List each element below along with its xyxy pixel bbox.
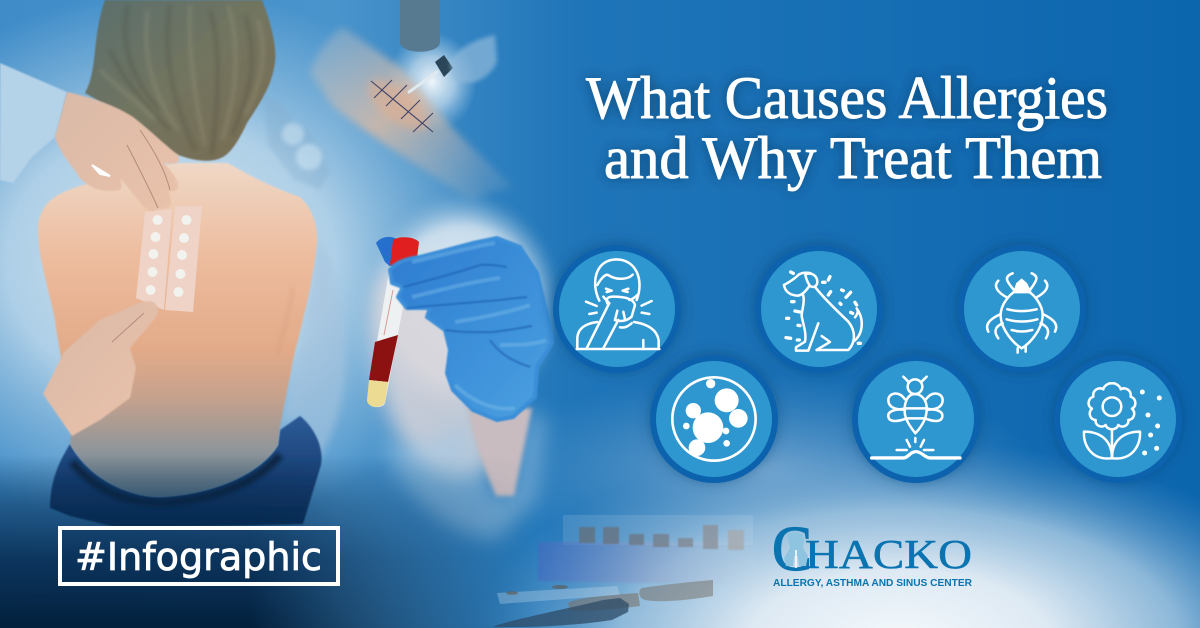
collection tube xyxy=(493,598,629,627)
logo lungs figure xyxy=(784,532,808,568)
logo tagline: ALLERGY, ASTHMA AND SINUS CENTER xyxy=(773,577,972,589)
forearm xyxy=(468,408,532,496)
icon: bee stinging skin xyxy=(872,377,960,458)
tray dots xyxy=(506,585,568,595)
background: ghost figure beside child xyxy=(282,240,345,460)
jeans xyxy=(50,416,322,528)
icon: sneezing person xyxy=(577,259,659,349)
tube cap xyxy=(390,237,419,268)
icon circle: mold spores xyxy=(653,358,775,480)
arm glow xyxy=(387,32,477,132)
icon circle: dog xyxy=(758,248,880,370)
photo: gloved hand with blood test tube xyxy=(362,193,562,540)
back xyxy=(38,163,317,497)
glove shading xyxy=(403,243,546,409)
lower hand xyxy=(43,301,158,436)
hashtag label xyxy=(60,528,338,584)
icon circle: dust mite xyxy=(961,248,1083,370)
label text: #Infographic xyxy=(75,535,322,579)
rack body xyxy=(538,542,757,583)
patch strip left xyxy=(136,209,172,310)
doctor sleeve xyxy=(0,63,67,183)
allergen bottle xyxy=(400,0,440,52)
icon: flower with pollen xyxy=(1084,383,1162,459)
waistband shadow xyxy=(72,455,280,503)
arm crease right xyxy=(277,287,293,355)
title line 1: What Causes Allergies xyxy=(586,65,1108,131)
patch test dots xyxy=(146,215,192,297)
patch strip right xyxy=(165,206,202,312)
vial lying 1 xyxy=(639,580,713,601)
rack glass tubes xyxy=(563,515,753,545)
icon: dog with dander xyxy=(784,272,862,351)
photo: child's back with patch test xyxy=(0,0,322,528)
vial lying 2 xyxy=(568,593,640,611)
hair strands xyxy=(100,5,263,155)
background: bottom-right pale fade xyxy=(440,430,1200,628)
bottom dark fade xyxy=(0,460,523,628)
doctor's hand with dropper xyxy=(450,35,497,83)
icon circle: bee sting xyxy=(855,358,977,480)
dropper cap xyxy=(435,55,453,77)
title xyxy=(586,65,1108,191)
arm xyxy=(310,27,513,200)
background: mid lower glow xyxy=(480,375,1200,565)
title line 2: and Why Treat Them xyxy=(604,125,1102,191)
arm warm patch xyxy=(360,70,436,140)
background: left light glow xyxy=(0,0,500,530)
label box xyxy=(60,528,338,584)
logo big C: C xyxy=(772,514,812,584)
icon circle: flower pollen xyxy=(1057,358,1179,480)
serum xyxy=(367,380,388,407)
rack tube levels xyxy=(579,525,744,550)
hair xyxy=(85,0,275,161)
hand finger gaps xyxy=(127,130,170,208)
glove xyxy=(390,238,552,420)
faded tube rack xyxy=(493,515,757,627)
white glow behind tube xyxy=(362,193,562,417)
dropper glass xyxy=(409,72,437,92)
upper hand xyxy=(55,92,179,212)
photo: upper arm skin test xyxy=(310,0,513,200)
logo xyxy=(772,514,972,589)
icon: dust mite xyxy=(987,273,1056,353)
skin test grid xyxy=(371,80,433,132)
technician torso xyxy=(371,257,490,478)
tube red line xyxy=(384,290,393,335)
logo wordmark: HACKO xyxy=(805,531,972,577)
white sleeve xyxy=(379,408,545,540)
icon circle: person sneezing xyxy=(556,248,678,370)
hand gap xyxy=(92,165,110,176)
test tube xyxy=(367,266,404,407)
glove back thumb xyxy=(376,237,398,272)
blood xyxy=(369,335,398,382)
tray white strip xyxy=(497,586,620,604)
lower hand finger gap xyxy=(112,313,144,342)
background: ghost allergen bottles xyxy=(263,95,330,190)
icon: mold petri dish xyxy=(672,377,756,461)
